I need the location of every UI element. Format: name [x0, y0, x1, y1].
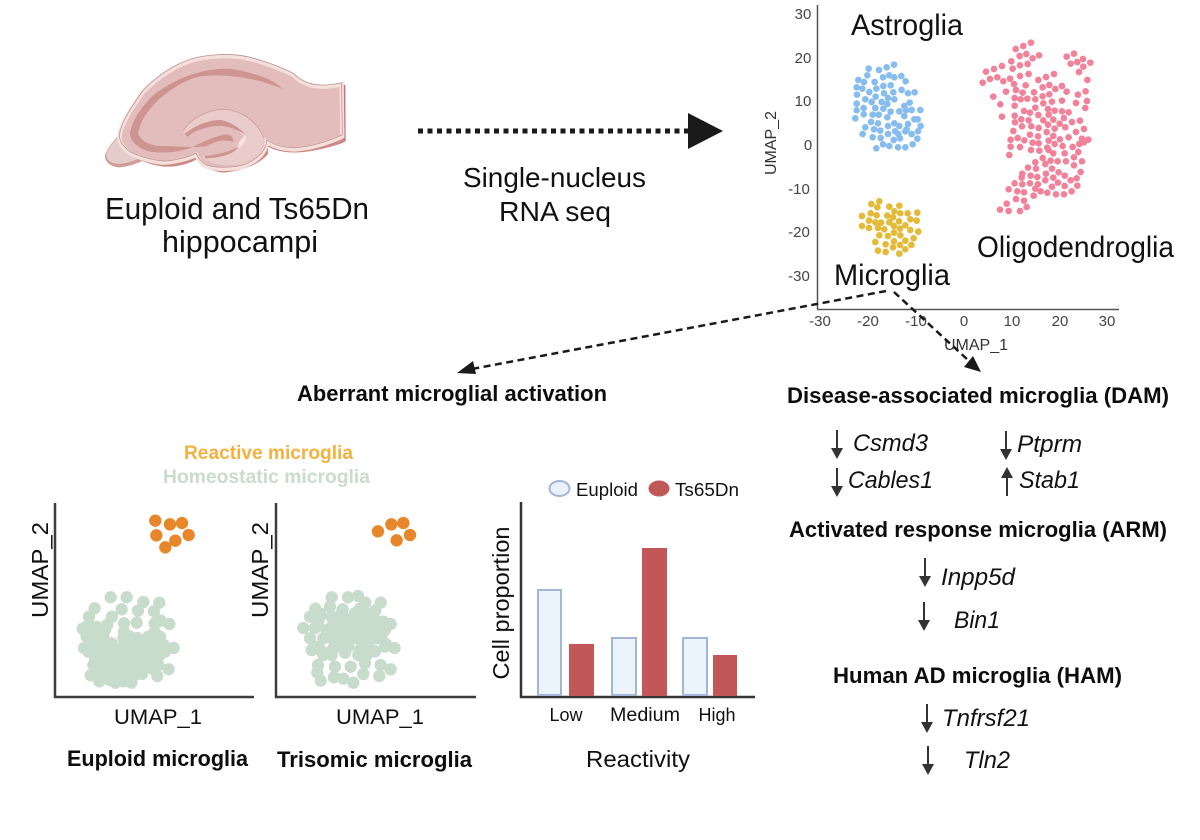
- gene list: ARM: Inpp5d: [941, 564, 1016, 591]
- gene list: DAM: Ptprm: [1017, 431, 1082, 458]
- chart: euploid microglia UMAP: UMAP_2: [27, 522, 53, 618]
- label: single-nucleus RNA seq: RNA seq: [499, 196, 611, 227]
- legend: genotype: [550, 479, 739, 500]
- heading: HAM: Human AD microglia (HAM): [833, 663, 1122, 688]
- cluster labels: Astroglia: [851, 9, 963, 42]
- chart: UMAP of glia: 30: [1099, 313, 1115, 330]
- chart: UMAP of glia: 0: [804, 137, 812, 154]
- legend: microglia states: Homeostatic microglia: [163, 467, 370, 488]
- gene list: ARM: [918, 558, 1016, 634]
- chart: cell proportion bars: High: [698, 705, 736, 725]
- chart: UMAP of glia: -20: [857, 313, 879, 330]
- chart: UMAP of glia: 10: [795, 93, 811, 110]
- chart: UMAP of glia: 30: [795, 6, 811, 23]
- label: hippocampi: Euploid and Ts65Dn: [105, 191, 369, 226]
- heading: ARM: Activated response microglia (ARM): [789, 517, 1167, 542]
- chart: UMAP of glia: [763, 5, 1119, 354]
- icon: hippocampus: [105, 54, 346, 173]
- chart: cell proportion bars: Low: [549, 705, 584, 725]
- chart: UMAP of glia: 10: [1004, 313, 1020, 330]
- chart: UMAP of glia: -10: [788, 181, 810, 198]
- gene list: HAM: [921, 704, 1030, 775]
- legend: genotype: Euploid: [576, 479, 638, 500]
- label: single-nucleus RNA seq: [463, 162, 646, 227]
- label: hippocampi: hippocampi: [162, 224, 318, 259]
- chart: UMAP of glia: UMAP_1: [944, 337, 1008, 354]
- gene list: DAM: [831, 430, 1082, 497]
- chart: trisomic microglia UMAP: [247, 503, 476, 729]
- chart: UMAP of glia: 20: [1052, 313, 1068, 330]
- legend: microglia states: [163, 443, 370, 488]
- legend: microglia states: Reactive microglia: [184, 443, 353, 464]
- caption: trisomic microglia: Trisomic microglia: [277, 747, 473, 772]
- chart: cell proportion bars: Cell proportion: [488, 526, 514, 680]
- heading: DAM: Disease-associated microglia (DAM): [787, 383, 1169, 408]
- legend: genotype: Ts65Dn: [675, 479, 739, 500]
- arrow: to aberrant activation: [457, 291, 886, 374]
- chart: trisomic microglia UMAP: UMAP_2: [247, 522, 273, 618]
- chart: UMAP of glia: 0: [960, 313, 968, 330]
- heading: aberrant microglial activation: Aberrant microglial activation: [297, 381, 607, 406]
- chart: euploid microglia UMAP: [27, 503, 254, 729]
- astroglia dots: [855, 65, 921, 148]
- chart: UMAP of glia: -20: [788, 224, 810, 241]
- chart: UMAP of glia: UMAP_2: [763, 111, 780, 175]
- caption: euploid microglia: Euploid microglia: [67, 746, 249, 771]
- arrow: to UMAP: [418, 113, 723, 149]
- chart: euploid microglia UMAP: UMAP_1: [114, 706, 202, 729]
- chart: trisomic microglia UMAP: UMAP_1: [336, 706, 424, 729]
- microglia dots: [862, 201, 918, 254]
- gene list: DAM: Stab1: [1019, 467, 1080, 494]
- chart: UMAP of glia: -10: [905, 313, 927, 330]
- gene list: HAM: Tnfrsf21: [942, 705, 1030, 732]
- oligodendroglia dots: [983, 43, 1090, 211]
- label: single-nucleus RNA seq: Single-nucleus: [463, 162, 646, 193]
- chart: cell proportion bars: [488, 479, 755, 772]
- cluster labels: Microglia: [834, 259, 950, 292]
- gene list: DAM: Csmd3: [853, 430, 929, 457]
- cluster labels: [834, 9, 1174, 292]
- chart: UMAP of glia: -30: [788, 268, 810, 285]
- cluster labels: Oligodendroglia: [977, 231, 1174, 264]
- arrow: to DAM: [894, 292, 981, 372]
- chart: cell proportion bars: Medium: [610, 705, 680, 726]
- chart: UMAP of glia: 20: [795, 50, 811, 67]
- gene list: DAM: Cables1: [848, 467, 933, 494]
- label: hippocampi: [105, 191, 369, 259]
- gene list: HAM: Tln2: [964, 747, 1010, 774]
- gene list: ARM: Bin1: [954, 607, 1000, 634]
- chart: UMAP of glia: -30: [809, 313, 831, 330]
- chart: cell proportion bars: Reactivity: [586, 746, 691, 772]
